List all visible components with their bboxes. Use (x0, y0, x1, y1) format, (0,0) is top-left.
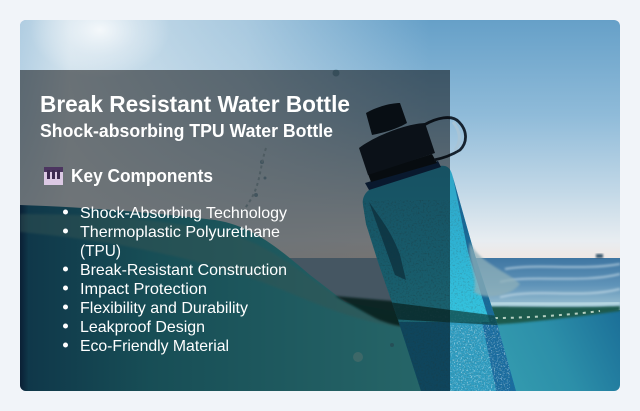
list of key components: Break-Resistant Construction (80, 262, 287, 279)
icon: water bottle (359, 103, 530, 395)
list of key components: Thermoplastic Polyurethane (80, 224, 280, 241)
underwater right (497, 310, 620, 391)
list of key components: Leakproof Design (80, 319, 205, 336)
title: Break Resistant Water Bottle (40, 91, 350, 117)
list of key components: (TPU) (80, 243, 121, 260)
splash on bottle side (469, 242, 520, 296)
handle (424, 118, 466, 160)
subtitle: Shock-absorbing TPU Water Bottle (40, 121, 333, 141)
list of key components (63, 205, 287, 355)
list of key components: Eco-Friendly Material (80, 338, 229, 355)
heading: key components: Key Components (71, 166, 213, 186)
wave band (20, 214, 620, 330)
list of key components: Impact Protection (80, 281, 207, 298)
panel overlay (20, 70, 450, 391)
underwater left (20, 205, 450, 391)
cap (359, 123, 435, 175)
lower bottle, dark behind panel (399, 322, 450, 391)
icon: piano keys (44, 167, 63, 185)
distant splash droplets (254, 70, 394, 362)
list of key components: Shock-Absorbing Technology (80, 205, 287, 222)
list of key components: Flexibility and Durability (80, 300, 248, 317)
sky background (20, 0, 620, 260)
neck ring (365, 161, 441, 190)
bottle body (362, 166, 516, 391)
sea surface (280, 254, 620, 313)
